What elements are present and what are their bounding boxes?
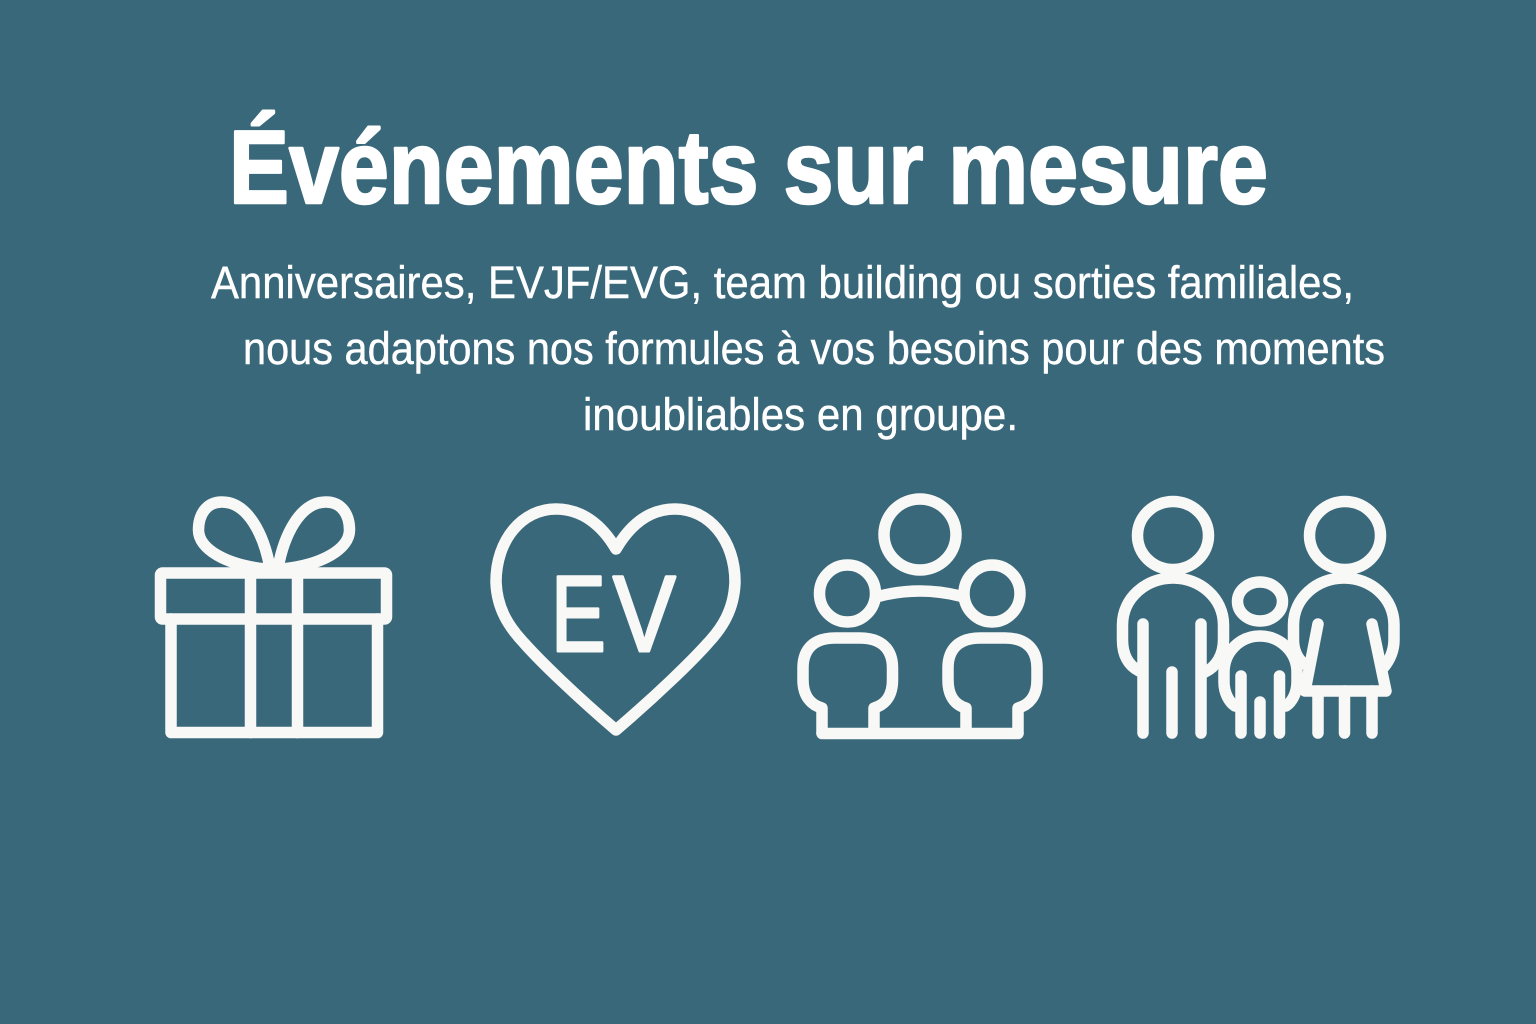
icon: team group — [803, 499, 1037, 734]
title: Événements sur mesure — [229, 110, 1268, 226]
description text block: nous adaptons nos formules à vos besoins pour des moments — [243, 323, 1385, 374]
EV label: V — [613, 554, 676, 674]
EV label: E — [551, 554, 606, 675]
description text block: inoubliables en groupe. — [583, 389, 1018, 440]
description text block — [211, 257, 1385, 440]
icon: gift box — [160, 502, 386, 732]
EV label — [551, 554, 676, 675]
description text block: Anniversaires, EVJF/EVG, team building ou sorties familiales, — [211, 257, 1354, 308]
icon: family — [1122, 502, 1394, 733]
icon: heart with EV — [496, 509, 735, 730]
